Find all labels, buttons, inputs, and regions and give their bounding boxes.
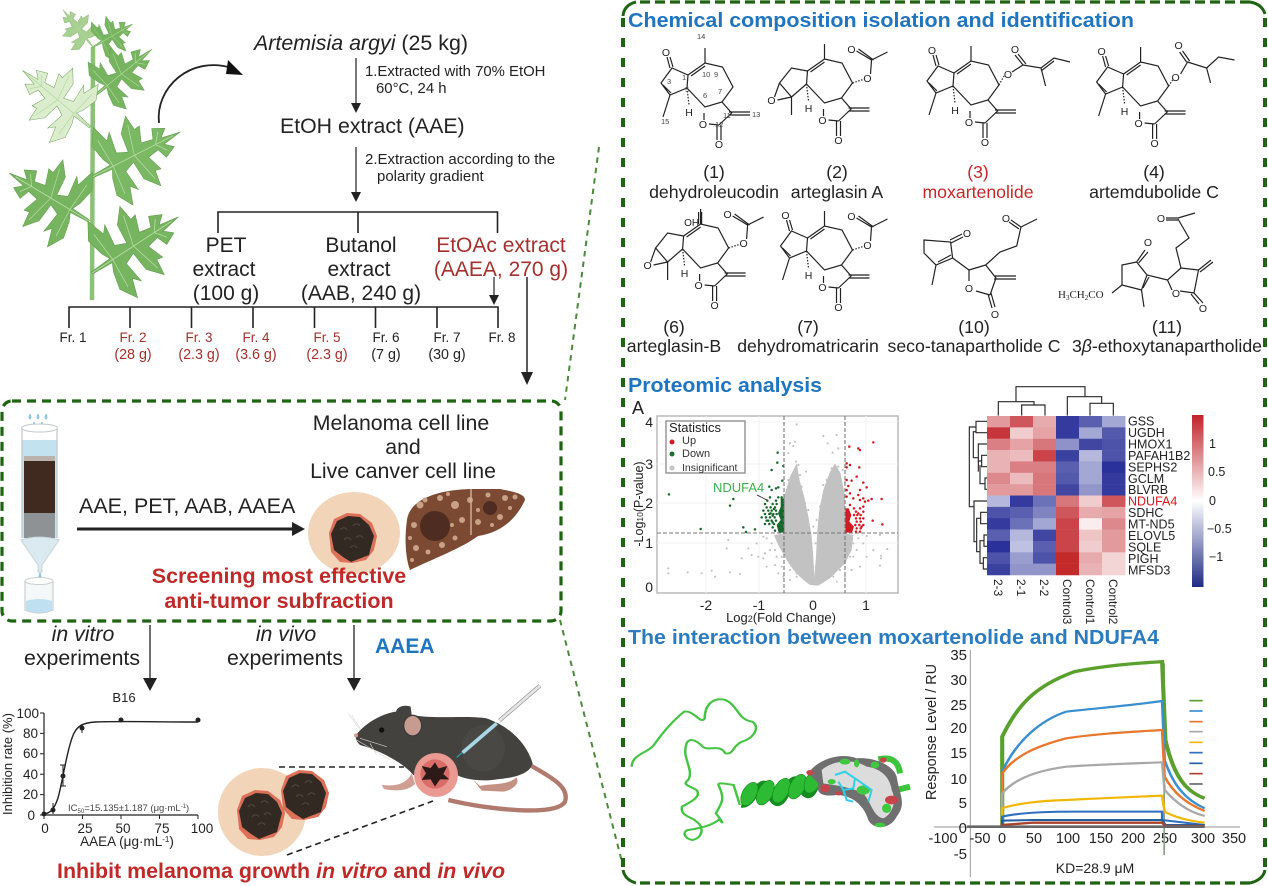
molecule 11: O: [1157, 213, 1165, 225]
legend: statistics: Down: [682, 448, 710, 460]
molecule 6: [644, 209, 764, 312]
chart: volcano plot: 0: [645, 579, 653, 595]
arrow: in vivo: [347, 625, 361, 691]
dashed zoom lines: [279, 767, 433, 855]
partition bracket: [218, 212, 498, 233]
chart: inhibition dose response: 20: [23, 787, 38, 802]
chart: heatmap: MT-ND5: [1128, 518, 1175, 532]
chart: SPR sensorgram: 200: [1121, 831, 1145, 847]
captions row 2: dehydromatricarin: [737, 336, 879, 356]
fraction labels: Fr. 4: [242, 330, 270, 345]
extract labels: (AAEA, 270 g): [434, 258, 568, 281]
chart: inhibition dose response: 100: [191, 821, 213, 836]
fraction labels: Fr. 6: [372, 330, 400, 345]
fraction labels: Fr. 7: [433, 330, 461, 345]
chart: SPR sensorgram: 150: [1089, 831, 1113, 847]
captions row 2: 3β-ethoxytanapartholide: [1072, 336, 1262, 356]
arrow: extracts to cell lines: [77, 522, 305, 536]
label: screening goal: Screening most effective: [152, 564, 406, 588]
icon: tumorous liver: [406, 489, 525, 570]
molecule 11: O: [1172, 288, 1180, 300]
chart: volcano plot: -Log10(P-value): [632, 461, 646, 547]
molecule 1 atom numbers: 15: [661, 117, 669, 126]
chart: SPR sensorgram: 100: [1056, 831, 1080, 847]
chart: heatmap: PAFAH1B2: [1128, 449, 1190, 463]
chart: volcano plot: -2: [700, 597, 712, 613]
chart: SPR sensorgram: -5: [954, 846, 967, 863]
labels: in vitro and in vivo: experiments: [227, 646, 343, 670]
chart: SPR sensorgram: 10: [950, 771, 967, 788]
chart: inhibition dose response: ): [186, 803, 189, 814]
captions row 1: moxartenolide: [922, 182, 1034, 202]
chart: SPR sensorgram: -100: [928, 831, 958, 847]
molecule 11: H: [1058, 289, 1066, 301]
color scale bar: 1: [1209, 437, 1216, 451]
arrow: plant extract to EtOH extract: [351, 58, 361, 113]
molecule 6: OH: [684, 218, 699, 229]
chart: inhibition dose response: -1: [181, 804, 187, 810]
fraction labels: Fr. 1: [59, 330, 87, 345]
chart: heatmap: GCLM: [1128, 472, 1164, 486]
legend: statistics: Insignificant: [682, 462, 738, 474]
chart: SPR sensorgram: Response Level / RU: [924, 664, 940, 800]
labels: in vitro and in vivo: experiments: [24, 646, 140, 670]
chart: heatmap: SDHC: [1128, 506, 1163, 520]
illustration: Artemisia argyi plant: [0, 0, 203, 311]
label: tested extracts: AAE, PET, AAB, AAEA: [79, 494, 296, 518]
label: cell lines: Live canver cell line: [310, 459, 496, 483]
icon: melanoma in skin: [308, 492, 400, 574]
labels: in vitro and in vivo: [24, 622, 343, 670]
legend: statistics: Statistics: [669, 420, 722, 435]
chart: inhibition dose response: 0: [41, 821, 49, 836]
connector: dashed line to right panel bottom: [560, 620, 622, 862]
extraction flow text: 1.Extracted with 70% EtOH: [365, 64, 545, 80]
chart: volcano plot: 1: [862, 597, 870, 613]
fraction labels: (2.3 g): [306, 347, 348, 363]
molecule 1 atom numbers: 3: [667, 77, 671, 86]
molecule 11: 2: [1085, 294, 1089, 302]
label: screening goal: [152, 564, 406, 613]
chart: heatmap: UGDH: [1128, 426, 1165, 440]
chart: SPR sensorgram: 50: [1026, 831, 1042, 847]
molecule 10: O: [991, 309, 999, 321]
chart: inhibition dose response: 25: [77, 821, 93, 836]
fraction labels: Fr. 5: [313, 330, 341, 345]
chart: inhibition dose response: 75: [154, 821, 170, 836]
molecule 1 atom numbers: 5: [685, 85, 689, 94]
chart: volcano plot: [632, 414, 898, 625]
fraction labels: (30 g): [428, 347, 466, 363]
labels: in vitro and in vivo: in vivo: [256, 622, 316, 646]
molecule 1 atom numbers: 13: [752, 110, 760, 119]
chart: inhibition dose response: -1: [162, 835, 170, 844]
captions row 1: (4): [1143, 162, 1165, 182]
panel: right results: [623, 2, 1265, 883]
legend: statistics: Up: [682, 435, 696, 447]
molecule 1 atom numbers: 14: [697, 32, 705, 41]
chart: SPR sensorgram: 0: [998, 831, 1006, 847]
chart: SPR sensorgram: 25: [950, 697, 967, 714]
extraction flow text: 60°C, 24 h: [376, 81, 447, 97]
conclusion text: Inhibit melanoma growth in vitro and in vivo: [57, 859, 505, 883]
fraction labels: (3.6 g): [235, 347, 277, 363]
chart: SPR sensorgram: [924, 647, 1246, 877]
heading: interaction: The interaction between moxartenolide and NDUFA4: [628, 626, 1160, 649]
arrow: EtOH extract to partition: [351, 147, 361, 202]
heading: chemical composition: Chemical composition isolation and identification: [628, 9, 1134, 32]
chart: inhibition dose response: 50: [78, 809, 85, 815]
chart: volcano plot: 3: [645, 456, 653, 472]
chart: heatmap: BLVRB: [1128, 483, 1168, 497]
extract labels: (100 g): [193, 282, 259, 305]
arrow: EtOAc to screening: [521, 277, 533, 385]
chart: heatmap: 2-3: [991, 579, 1005, 597]
label: cell lines: [310, 411, 496, 483]
chart: inhibition dose response: AAEA (μg·mL: [80, 834, 162, 849]
fraction labels: (28 g): [114, 347, 152, 363]
molecule 1 atom numbers: 1: [682, 73, 686, 82]
extract labels: extract: [192, 258, 256, 281]
chart: volcano plot: 0: [809, 597, 817, 613]
molecule 11: O: [1199, 303, 1207, 315]
chart: heatmap: [969, 387, 1232, 625]
extract labels: extract: [327, 258, 391, 281]
captions row 2: (7): [797, 317, 819, 337]
color scale bar: −0.5: [1207, 522, 1232, 536]
molecule 1 atom numbers: [661, 32, 760, 129]
icon: chromatography column: [21, 414, 59, 613]
extract labels: EtOAc extract: [436, 234, 566, 257]
molecule 7: [780, 210, 888, 314]
labels: in vitro and in vivo: in vitro: [52, 622, 115, 646]
color scale bar: 0.5: [1208, 465, 1225, 479]
molecule 4: [1097, 40, 1235, 150]
chart: SPR sensorgram: 250: [1153, 831, 1177, 847]
molecule 11: O: [1144, 237, 1152, 249]
molecule 10: O: [963, 228, 971, 240]
chart: inhibition dose response: =15.135±1.187 (μg·mL: [84, 803, 181, 814]
chart: heatmap: HMOX1: [1128, 438, 1172, 452]
molecule 11: CH: [1069, 289, 1085, 301]
label: cell lines: and: [385, 435, 421, 459]
extract labels: PET: [206, 234, 247, 257]
chart: heatmap: 2-1: [1014, 579, 1028, 597]
chart: inhibition dose response: 80: [23, 726, 38, 741]
extract labels: Butanol: [325, 234, 397, 257]
captions row 2: (6): [663, 317, 685, 337]
captions row 1: (2): [826, 162, 848, 182]
chart: volcano plot: Log2(Fold Change): [726, 610, 836, 625]
captions row 1: dehydroleucodin: [649, 182, 779, 202]
label: panel A: A: [632, 398, 644, 418]
molecule 2: [767, 44, 888, 147]
molecule 11: CO: [1088, 289, 1104, 301]
chart: SPR sensorgram: 300: [1191, 831, 1215, 847]
chart: SPR sensorgram: 20: [950, 720, 967, 737]
molecule 1 atom numbers: 7: [718, 87, 722, 96]
captions row 1: arteglasin A: [791, 182, 883, 202]
chart: heatmap: SQLE: [1128, 540, 1161, 554]
captions row 2: arteglasin-B: [627, 336, 721, 356]
chart: SPR sensorgram: KD=28.9 μM: [1056, 860, 1134, 876]
chart: heatmap: MFSD3: [1128, 564, 1170, 578]
chart: volcano plot: 1: [645, 535, 653, 551]
color scale bar: [1192, 415, 1232, 587]
chart: volcano plot: -1: [753, 597, 765, 613]
molecule 11: [1058, 213, 1213, 315]
chart: SPR sensorgram: -50: [970, 831, 990, 847]
chart: SPR sensorgram: 35: [950, 647, 967, 664]
chart: heatmap: GSS: [1128, 414, 1154, 428]
chart: SPR sensorgram: 5: [959, 795, 967, 812]
extract labels: (AAB, 240 g): [301, 282, 421, 305]
molecule 4: O: [1175, 40, 1183, 52]
chart: inhibition dose response: 0: [27, 808, 35, 823]
chart: heatmap: PIGH: [1128, 552, 1159, 566]
arrow: in vitro: [143, 625, 157, 691]
chart: heatmap: Control1: [1083, 579, 1097, 625]
chart: volcano plot: 4: [645, 414, 653, 430]
extraction flow text: 2.Extraction according to the: [365, 151, 555, 168]
captions row 1: [649, 162, 1219, 202]
captions row 2: [627, 317, 1262, 356]
chart: heatmap: Control2: [1106, 579, 1120, 625]
molecule 1: [661, 47, 750, 151]
chart: heatmap: Control3: [1060, 579, 1074, 625]
extraction flow text: [252, 31, 555, 185]
molecule 3: O: [1011, 44, 1019, 56]
chart: inhibition dose response: 60: [23, 746, 38, 761]
icon: melanoma tumors in skin: [218, 768, 329, 856]
molecule 3: O: [1004, 69, 1012, 81]
molecule 1 atom numbers: 12: [715, 120, 723, 129]
molecule 4: O: [1172, 72, 1180, 84]
chart: inhibition dose response: 100: [16, 706, 39, 721]
panel: screening: [2, 401, 561, 621]
captions row 1: artemdubolide C: [1089, 182, 1219, 202]
chart: SPR sensorgram: 350: [1222, 831, 1246, 847]
captions row 2: (11): [1152, 317, 1182, 337]
extraction flow text: EtOH extract (AAE): [280, 114, 465, 138]
heading: proteomic analysis: Proteomic analysis: [628, 374, 822, 397]
chart: heatmap: 2-2: [1037, 579, 1051, 597]
label: screening goal: anti-tumor subfraction: [164, 589, 394, 613]
curved arrow from plant to extraction: [159, 60, 243, 123]
fractions tree: [69, 307, 498, 328]
captions row 1: (3): [967, 162, 989, 182]
fraction labels: (2.3 g): [178, 347, 220, 363]
chart: inhibition dose response: 40: [23, 767, 38, 782]
fraction labels: [59, 330, 516, 363]
molecule 10: [924, 213, 1037, 321]
legend: statistics: [666, 420, 745, 474]
fraction labels: Fr. 2: [119, 330, 147, 345]
chart: heatmap: ELOVL5: [1128, 529, 1175, 543]
chart: inhibition dose response: IC: [68, 803, 78, 814]
chart: inhibition dose response: Inhibition rate (%): [0, 713, 15, 815]
chart: inhibition dose response: [0, 690, 213, 849]
molecule 1 atom numbers: 11: [723, 111, 731, 120]
captions row 1: (1): [703, 162, 725, 182]
label: cell lines: Melanoma cell line: [313, 411, 489, 435]
label: NDUFA4: NDUFA4: [713, 480, 764, 495]
chart: volcano plot: 2: [645, 495, 653, 511]
illustration: tumor-bearing mouse: [348, 686, 566, 810]
arrow: EtOAc to Fr. 8: [489, 277, 499, 305]
molecule 1 atom numbers: 10: [702, 70, 710, 79]
chart: SPR sensorgram: 15: [950, 745, 967, 762]
fraction labels: Fr. 3: [185, 330, 213, 345]
label: AAEA: AAEA: [375, 635, 435, 658]
illustration: protein docking structure: [632, 699, 910, 840]
molecule 10: O: [965, 283, 973, 295]
color scale bar: 0: [1209, 494, 1216, 508]
fraction labels: (7 g): [371, 347, 401, 363]
color scale bar: −1: [1209, 550, 1223, 564]
extract labels: [192, 234, 568, 305]
chart: inhibition dose response: ): [169, 834, 174, 849]
chart: SPR sensorgram: 0: [959, 820, 967, 837]
extraction flow text: polarity gradient: [377, 168, 485, 185]
extraction flow text: Artemisia argyi (25 kg): [252, 31, 468, 55]
molecule 10: O: [1002, 213, 1010, 225]
molecule 11: 3: [1066, 294, 1070, 302]
molecule 3: [927, 44, 1070, 149]
captions row 2: (10): [958, 317, 990, 337]
fraction labels: Fr. 8: [488, 330, 516, 345]
chart: heatmap: NDUFA4: [1128, 494, 1177, 508]
captions row 2: seco-tanapartholide C: [887, 336, 1061, 356]
chart: inhibition dose response: B16: [112, 690, 136, 705]
molecule 1 atom numbers: 6: [703, 91, 707, 100]
connector: dashed line to right panel top: [565, 147, 599, 400]
chart: SPR sensorgram: 30: [950, 672, 967, 689]
molecule 1 atom numbers: 9: [714, 70, 718, 79]
chart: heatmap: SEPHS2: [1128, 460, 1177, 474]
chart: inhibition dose response: 50: [115, 821, 131, 836]
